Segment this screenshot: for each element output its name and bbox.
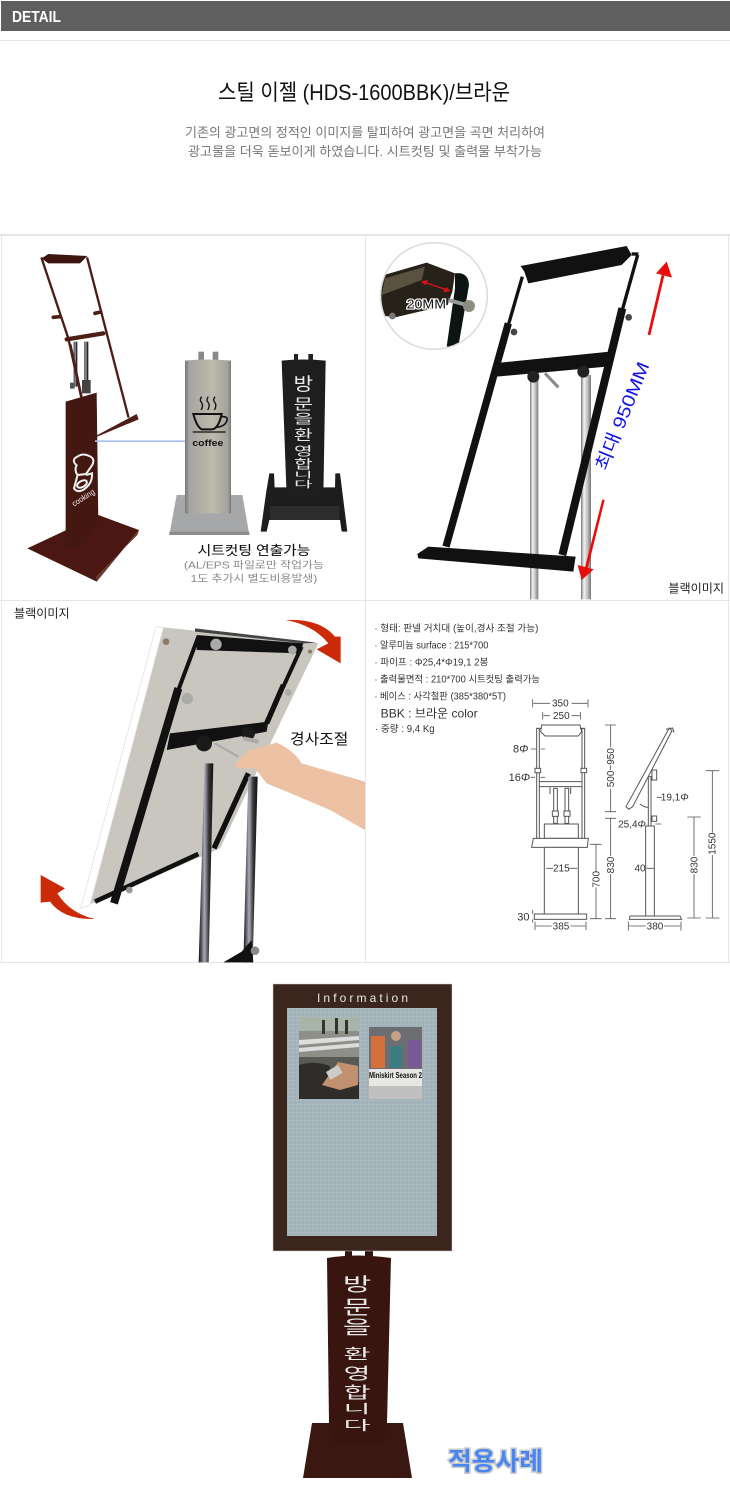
dimension values: 19,1Φ [661,793,689,804]
specification list: · 중량 : 9,4 Kg [375,723,435,735]
sheet cutting caption: (AL/EPS 파일로만 작업가능 [184,559,324,572]
welcome text on post: 을 [343,1318,371,1338]
chef hat logo [74,454,93,491]
application example stand [273,984,452,1478]
panel: specifications [374,623,540,735]
base plate [303,1423,412,1478]
red arrow up [648,262,672,335]
product title: 스틸 이젤 (HDS-1600BBK)/브라운 [218,80,510,105]
dimension values: 830 [689,856,700,873]
welcome text on post: 환 [343,1346,371,1362]
dimension values: 385 [553,922,570,933]
fabric board [287,1008,437,1236]
welcome text on post: 방 [343,1275,371,1295]
poster: road game [299,1017,359,1099]
specification list [374,623,540,735]
dimension values: 16Φ [509,772,530,784]
black welcome sign: 환 [294,427,313,443]
info board frame [273,984,452,1251]
specification list: · 파이프 : Φ25,4*Φ19,1 2봉 [374,658,488,669]
detail lens: 20MM [407,297,446,311]
support pipes [199,763,259,962]
red arrow down [578,499,605,580]
welcome text on post: 합 [343,1384,371,1402]
dimension values: 350 [552,699,569,710]
dimension values: 380 [647,922,664,933]
specification list: · 알루미늄 surface : 215*700 [374,640,488,651]
dimension values: 1550 [708,832,719,855]
dimension values: 700 [591,871,602,888]
dimension values: 215 [553,864,570,875]
connector line to coffee sign [95,434,205,447]
dimension values: 250 [553,711,570,722]
chrome pipes [530,373,591,599]
specification list: · 형태: 판넬 거치대 (높이,경사 조절 가능) [374,623,538,635]
product description: 광고물을 더욱 돋보이게 하였습니다. 시트컷팅 및 출력물 부착가능 [188,144,542,159]
back of panel [81,627,318,908]
silver coffee sign [169,352,249,535]
title block [185,80,545,159]
panel: brown stand and sheet cutting [27,254,347,585]
welcome text on post [343,1275,371,1433]
black welcome sign: 합 [294,458,313,472]
welcome text on post: 다 [343,1418,371,1433]
black welcome sign [261,354,347,532]
dimension values [509,699,719,933]
specification list: · 출력물면적 : 210*700 시트컷팅 출력가능 [374,674,540,686]
panel: black frame max 950mm [378,243,724,599]
side view [626,728,682,919]
brown easel stand: cooking [70,487,97,508]
detail lens [378,243,487,349]
application example label: 적용사례 [448,1448,543,1476]
welcome text on post: 문 [343,1297,371,1319]
sign post [327,1256,391,1443]
sheet cutting caption: 시트컷팅 연출가능 [198,543,310,558]
poster: miniskirt season: Miniskirt Season 2 [369,1071,422,1080]
dimension values: 25,4Φ [618,820,646,831]
header label: DETAIL [12,9,61,26]
panel: tilt adjustment [14,606,365,962]
sheet cutting caption: 1도 추가시 별도비용발생) [191,573,317,585]
black welcome sign: 다 [294,479,313,490]
sheet cutting caption [184,543,324,585]
red arrow top [286,620,341,663]
black welcome sign: 니 [294,471,313,480]
specification list: BBK : 브라운 color [381,707,478,720]
product description: 기존의 광고면의 정적인 이미지를 탈피하여 광고면을 곡면 처리하여 [185,125,545,140]
header bar [1,1,730,31]
red arrow bottom [41,875,95,919]
front view [532,725,588,919]
coffee cup icon [193,397,227,432]
silver coffee sign: coffee [192,438,223,448]
dimension values: 40 [634,863,646,874]
welcome text on post: 영 [343,1365,371,1383]
post connectors [345,1250,373,1256]
poster: miniskirt season [369,1027,422,1099]
welcome text on post: 니 [343,1402,371,1416]
brown easel stand [27,254,139,582]
black image caption: 블랙이미지 [668,582,724,596]
dimension values: 830 [606,856,617,873]
black welcome sign: 영 [294,444,313,458]
black image caption: 블랙이미지 [14,606,70,620]
dimension values: 30 [517,912,529,924]
info board heading: Information [317,991,408,1005]
black welcome sign: 방 [294,375,313,395]
dimension drawing [509,699,719,933]
hand adjusting knob [234,743,365,830]
black welcome sign: 문 [294,395,313,413]
product description [185,125,545,159]
dimension values: 8Φ [513,744,528,756]
tilt label: 경사조절 [290,731,348,748]
specification list: · 베이스 : 사각철판 (385*380*5T) [374,691,506,703]
black welcome sign: 을 [294,412,313,426]
dimension lines [531,699,719,931]
black frame [417,246,638,572]
black frame back [95,628,317,903]
dimension values: 500~950 [606,748,617,787]
max length label: 최대 950MM [592,359,653,473]
